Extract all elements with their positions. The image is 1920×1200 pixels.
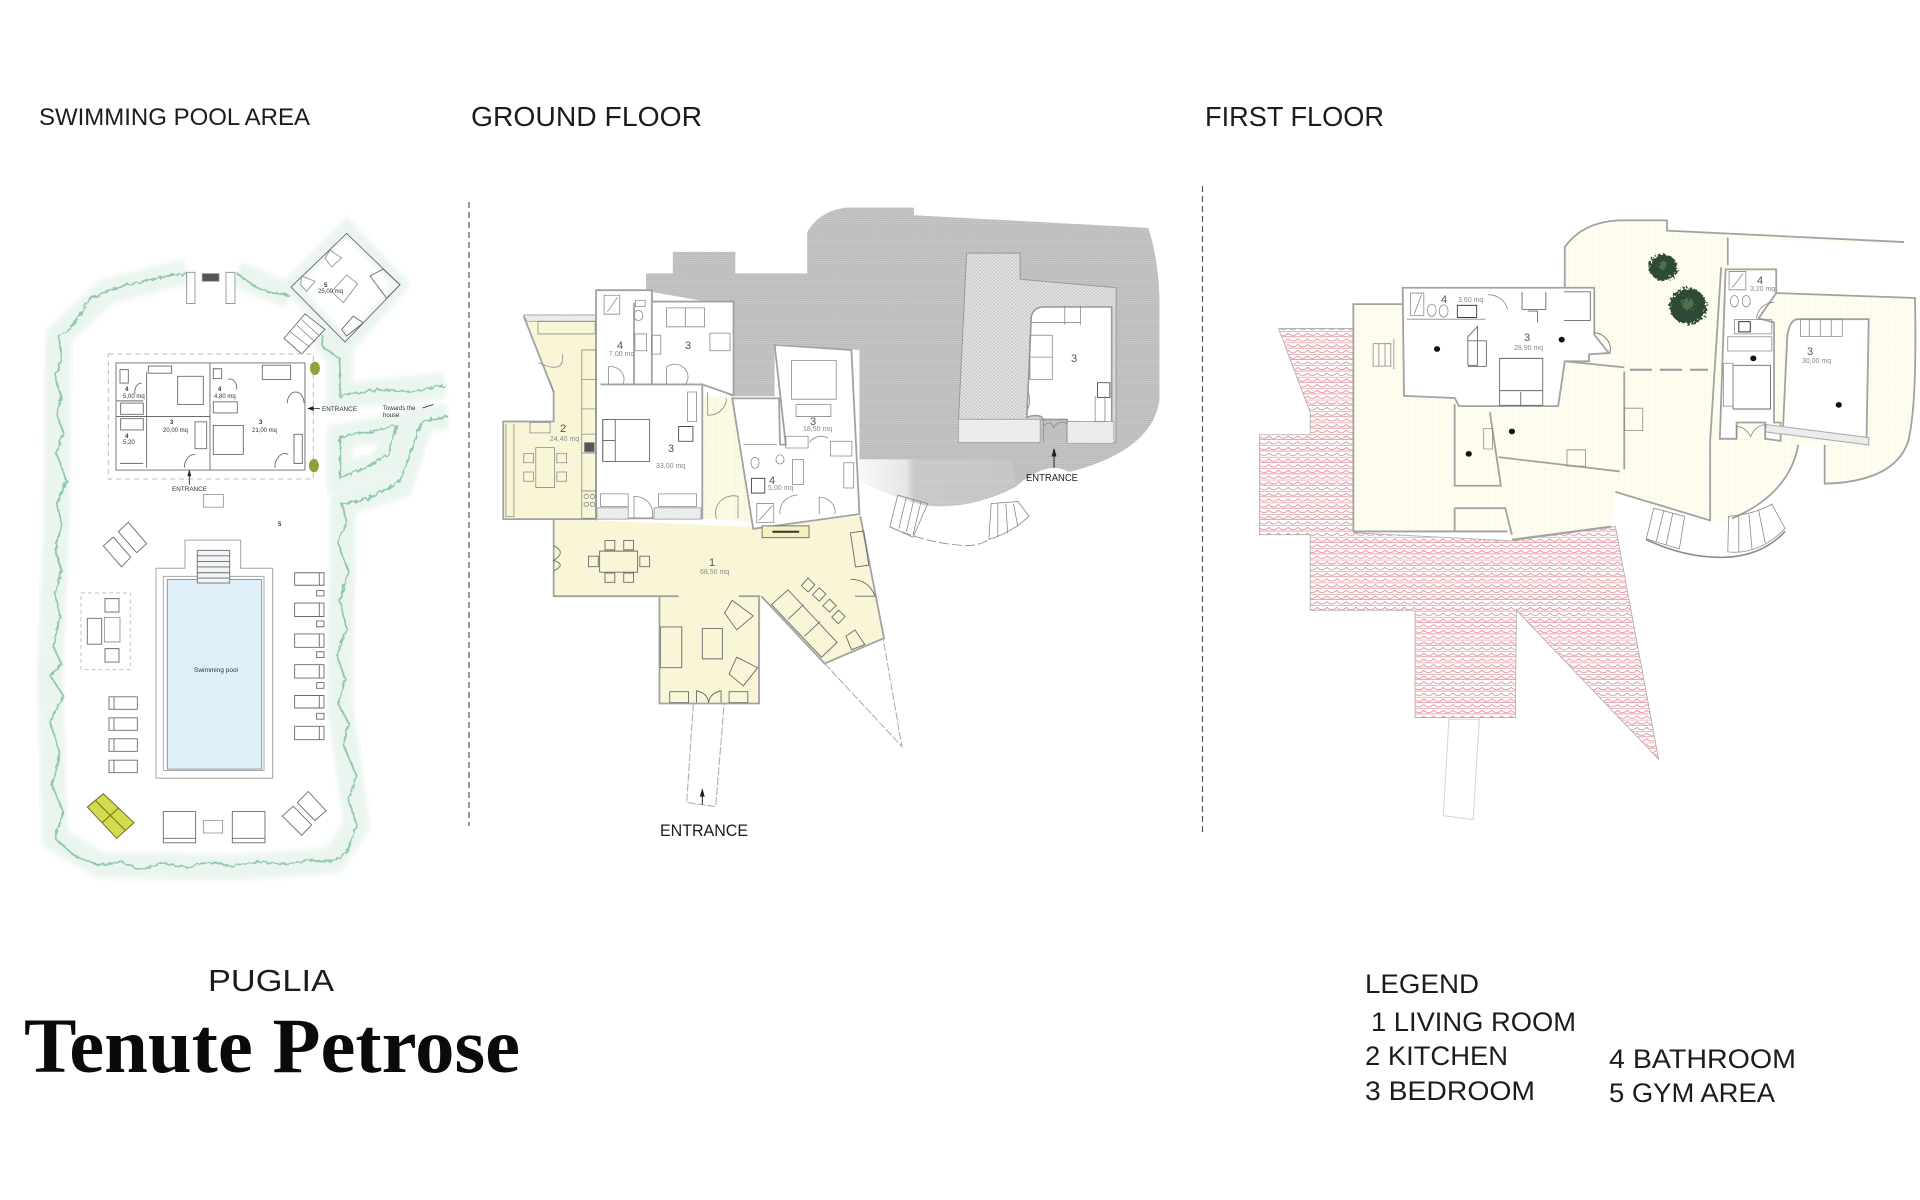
labels: pool area: ENTRANCE: [322, 407, 357, 413]
labels: pool area: 21,00 mq: [252, 428, 277, 434]
labels: pool area: [123, 283, 416, 674]
labels: pool area: Towards the: [383, 406, 416, 412]
labels: pool area: house: [383, 413, 400, 419]
faded paving strip: [859, 459, 1016, 506]
labels: pool area: 5: [324, 283, 328, 289]
entrance canopy lines: [687, 638, 902, 807]
terrace walls: [1353, 220, 1915, 540]
panel: ground floor plan: [503, 208, 1160, 840]
label: main entrance: ENTRANCE: [660, 821, 748, 840]
living dining table: [554, 541, 650, 582]
bedroom and bathroom annex: [732, 345, 859, 529]
labels: pool area: 4,80 mq: [214, 394, 236, 400]
labels: first floor: 4: [1757, 275, 1763, 287]
cream terrace: [1353, 221, 1915, 540]
east wing bedroom: [1720, 269, 1869, 445]
annex entrance arrow: [1052, 449, 1056, 468]
labels: pool area: 20,00 mq: [163, 428, 188, 434]
kitchen dining table: [506, 321, 595, 517]
labels: pool area: 3: [170, 420, 174, 426]
hedge outline: [50, 274, 448, 870]
labels: ground floor: 2: [560, 423, 566, 435]
entrance path: [1443, 719, 1479, 820]
subtitle: region: PUGLIA: [208, 963, 334, 998]
swimming pool: [156, 540, 273, 778]
labels: ground floor: 24,40 mq: [550, 436, 579, 443]
heading: ground floor: GROUND FLOOR: [471, 101, 702, 132]
angled sofa and stools: [771, 531, 875, 657]
labels: ground floor: 68,50 mq: [700, 569, 729, 576]
labels: pool area: 3: [259, 420, 263, 426]
legend item 1: 1 LIVING ROOM: [1371, 1007, 1576, 1037]
outdoor lounge: [81, 593, 130, 670]
labels: ground floor: 5,00 mq: [768, 485, 793, 492]
labels: first floor: [1441, 275, 1831, 365]
labels: first floor: 30,00 mq: [1802, 358, 1831, 365]
bottom sofas: [163, 812, 265, 843]
upper bedroom block: [1403, 288, 1609, 406]
dashed threshold: [1630, 369, 1708, 371]
legend item 4: 4 BATHROOM: [1609, 1044, 1796, 1074]
garden paving gray area: [646, 208, 1160, 506]
labels: ground floor: 3: [1071, 353, 1077, 365]
legend item 3: 3 BEDROOM: [1365, 1076, 1535, 1106]
panel: swimming pool area plan: [50, 227, 448, 870]
labels: first floor: 28,90 mq: [1514, 345, 1543, 352]
labels: pool area: 4: [125, 434, 129, 440]
panel: first floor plan: [1260, 220, 1915, 820]
lower rooms: [1455, 361, 1624, 535]
sun loungers left: [109, 697, 137, 773]
labels: ground floor: 4: [769, 475, 775, 487]
trees by the house: [309, 362, 320, 472]
bedroom block: [596, 290, 734, 518]
entrance arrows: [188, 404, 433, 485]
labels: first floor: 3,20 mq: [1750, 286, 1775, 293]
labels: ground floor: 3: [810, 416, 816, 428]
legend item 2: 2 KITCHEN: [1365, 1041, 1508, 1071]
table tennis: [87, 794, 134, 838]
legend item 5: 5 GYM AREA: [1609, 1078, 1775, 1108]
labels: pool area: ENTRANCE: [172, 487, 207, 493]
heading: swimming pool area: SWIMMING POOL AREA: [39, 104, 310, 131]
bedroom hatch: [597, 508, 701, 519]
labels: pool area: 4: [218, 387, 222, 393]
sofa and stairs: [601, 308, 738, 518]
labels: first floor: 3: [1807, 346, 1813, 358]
bathroom: [1407, 293, 1508, 319]
title block: [24, 963, 520, 1089]
guest house: [108, 354, 313, 479]
stair: [1373, 339, 1643, 466]
labels: pool area: Swimming pool: [194, 668, 238, 674]
hedge glow: [50, 227, 448, 867]
yellow living and kitchen area: [503, 320, 884, 703]
labels: ground floor: ENTRANCE: [1026, 472, 1078, 484]
labels: ground floor: [550, 340, 1078, 576]
legend: [1365, 969, 1796, 1108]
labels: ground floor: 3: [668, 443, 674, 455]
bathroom fixtures: [604, 295, 688, 384]
labels: pool area: 5: [278, 522, 282, 528]
sun loungers right: [295, 573, 324, 740]
diagonal loungers: [103, 522, 326, 835]
legend heading: LEGEND: [1365, 969, 1479, 999]
elevation markers: [1434, 337, 1842, 457]
sitting room furniture: [660, 600, 758, 703]
entrance arrow: [701, 790, 704, 805]
side bar unit: [187, 272, 235, 304]
labels: ground floor: 1: [709, 557, 715, 569]
labels: ground floor: 7,00 mq: [609, 351, 634, 358]
labels: first floor: 3: [1524, 332, 1530, 344]
kitchen counter: [582, 350, 596, 518]
labels: ground floor: 33,00 mq: [656, 463, 685, 470]
brick terrace: [1260, 329, 1659, 759]
small tables: [203, 495, 223, 833]
heading: first floor: FIRST FLOOR: [1205, 101, 1384, 132]
title: estate name: Tenute Petrose: [24, 1002, 520, 1089]
trees: [1649, 254, 1707, 324]
gym pavilion: [284, 233, 400, 354]
curved steps: [890, 495, 1029, 546]
annex building: [959, 253, 1116, 443]
labels: ground floor: 4: [617, 340, 623, 352]
labels: first floor: 3,60 mq: [1458, 297, 1483, 304]
labels: ground floor: 3: [685, 340, 691, 352]
annex furniture: [1028, 306, 1110, 421]
bed: [603, 419, 650, 461]
fireplace: [762, 526, 809, 538]
tiled courtyard: [703, 396, 779, 523]
labels: pool area: 5,20: [123, 440, 135, 446]
labels: pool area: 4: [125, 387, 129, 393]
labels: pool area: 25,00 mq: [318, 289, 343, 295]
labels: first floor: 4: [1441, 294, 1447, 306]
bedroom furniture: [1468, 292, 1610, 405]
labels: ground floor: 18,50 mq: [803, 426, 832, 433]
curved steps: [1646, 504, 1785, 557]
outer walls: [503, 316, 884, 703]
labels: pool area: 5,00 mq: [123, 394, 145, 400]
